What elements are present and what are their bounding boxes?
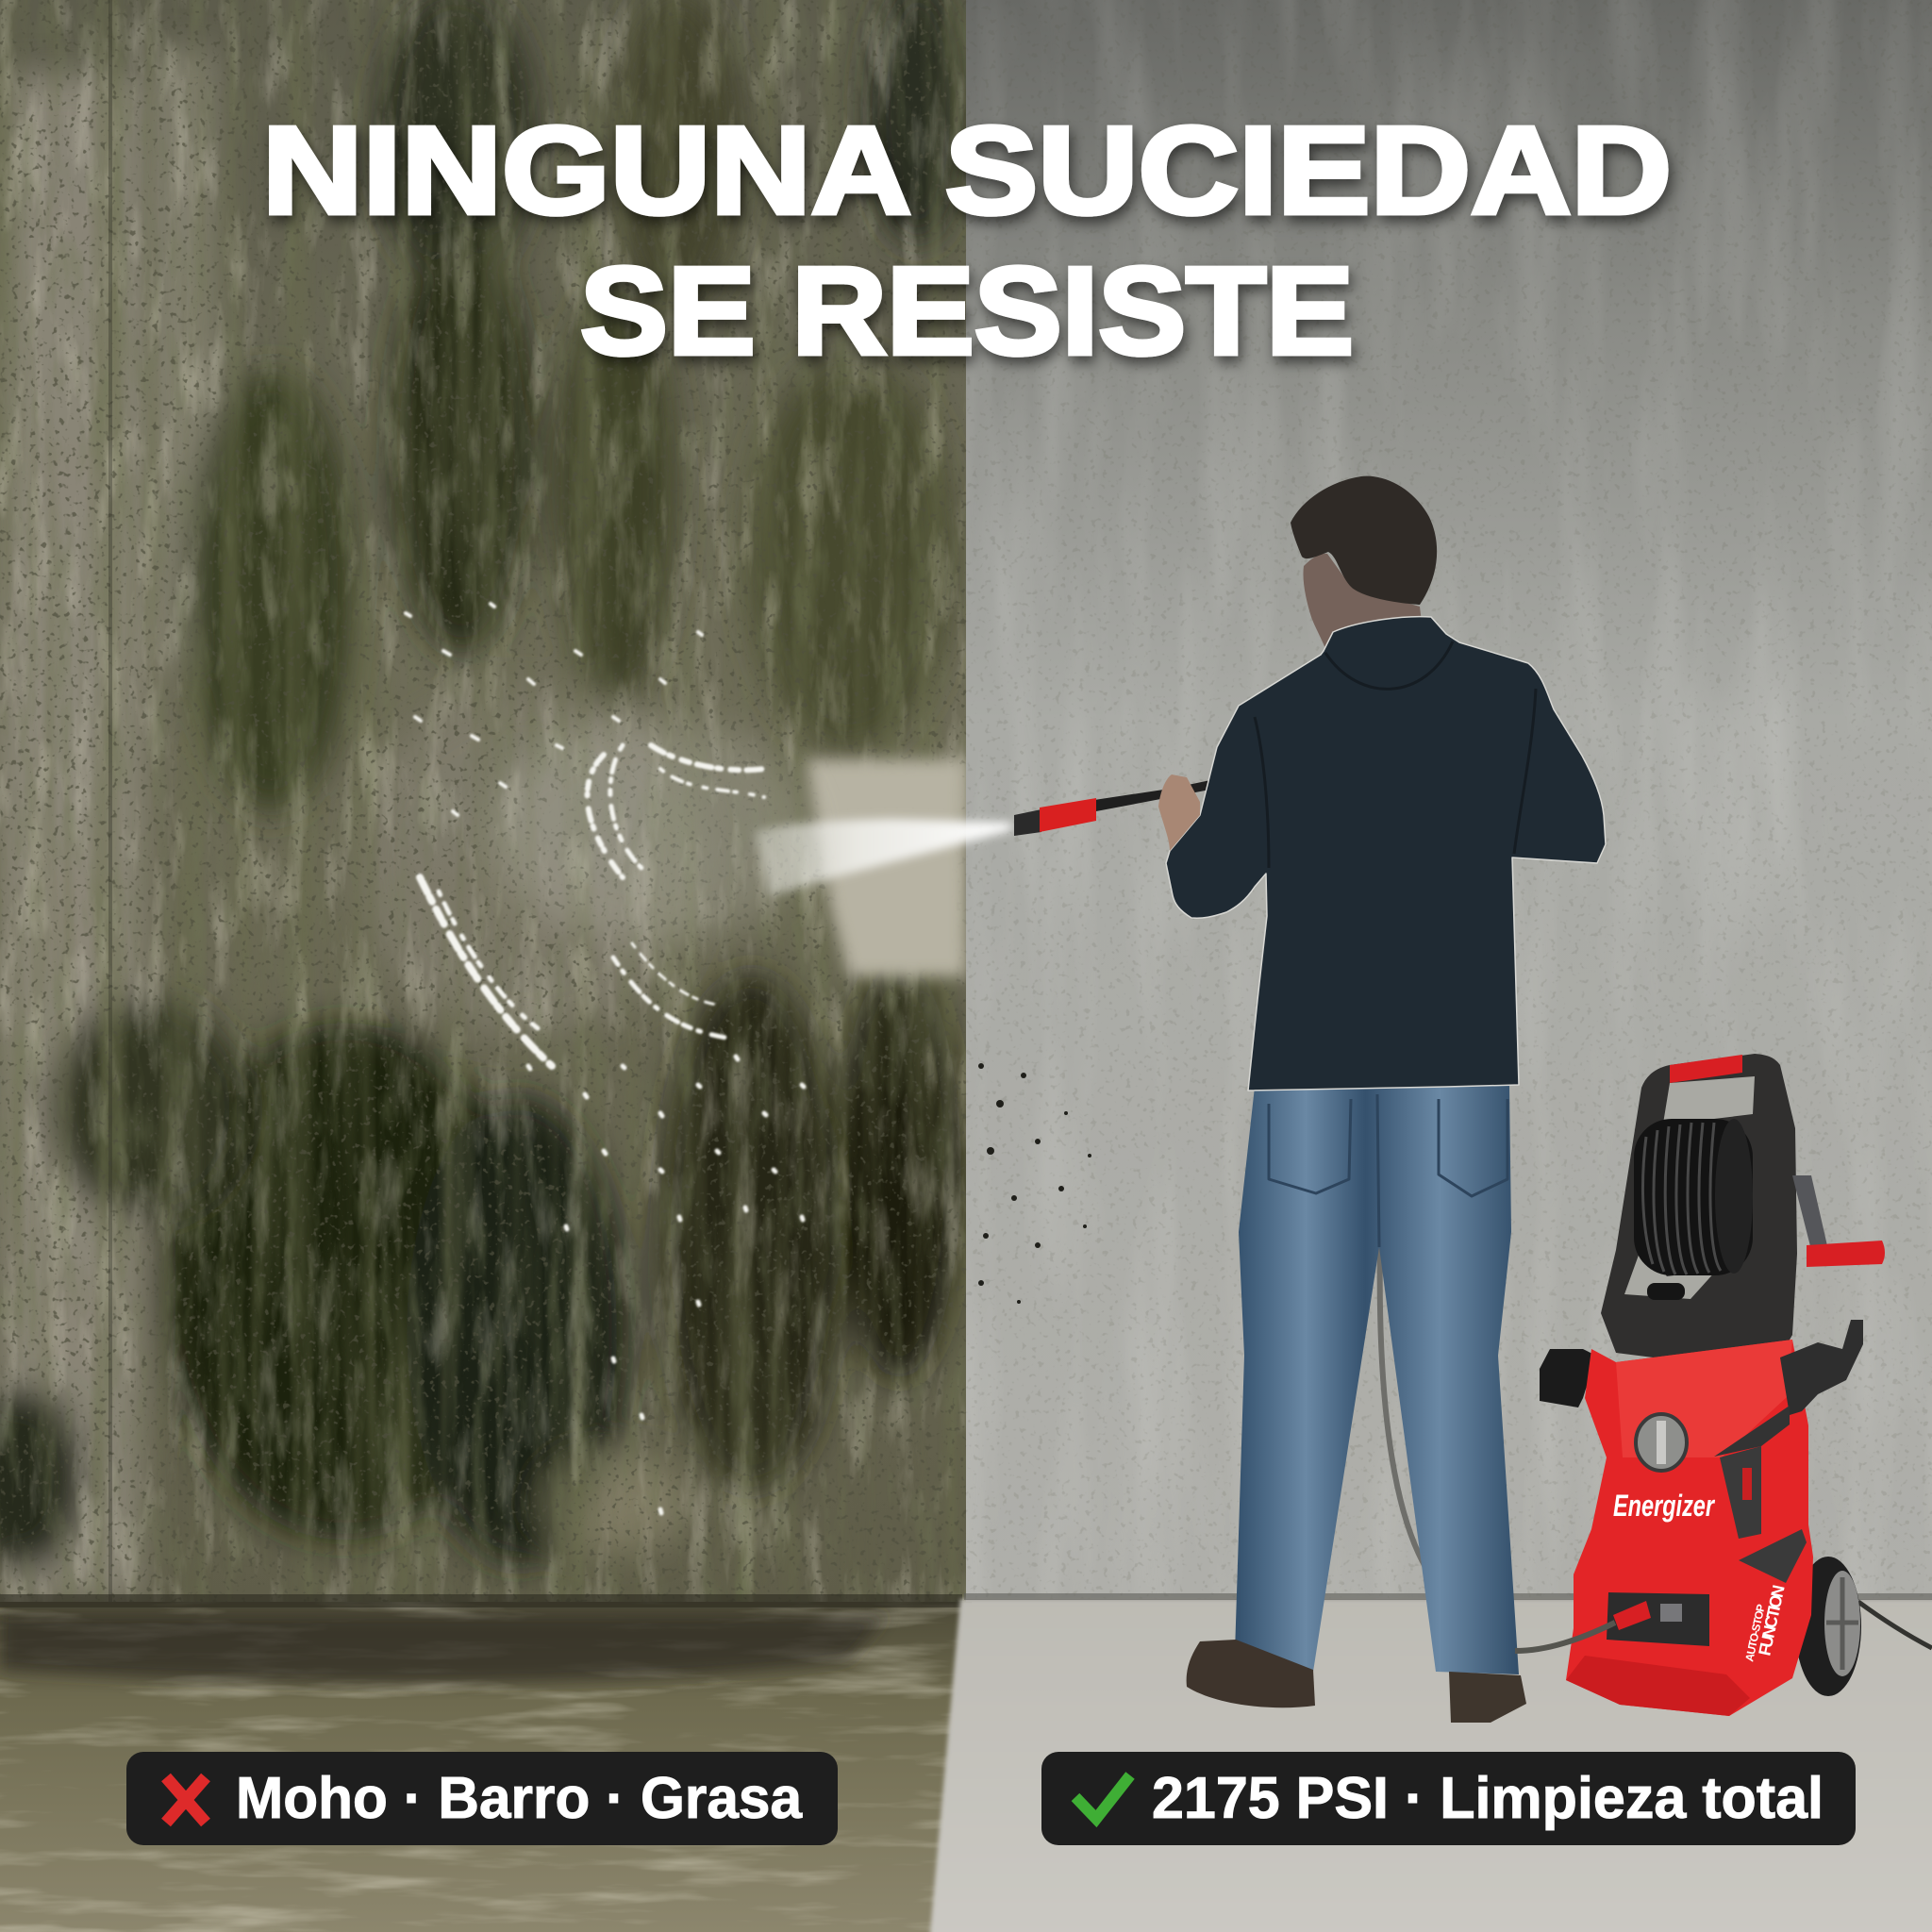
title line 1: NINGUNA SUCIEDAD (262, 101, 1672, 240)
wall texture (0, 0, 966, 1604)
function label: AUTO-STOP (1742, 1603, 1768, 1663)
hand (1158, 774, 1200, 851)
crank (1792, 1175, 1828, 1250)
frame openings (1624, 1076, 1755, 1299)
frame (1601, 1054, 1797, 1363)
badge text: solution: 2175 PSI · Limpieza total (1152, 1766, 1824, 1831)
badge text: problem: Moho · Barro · Grasa (236, 1766, 803, 1831)
man (1014, 476, 1606, 1723)
dark wedge (1714, 1406, 1790, 1457)
hose reel (1634, 1119, 1753, 1275)
base band (1566, 1656, 1750, 1716)
front hose (1515, 1601, 1651, 1651)
cleaned strip (807, 759, 966, 976)
vents (1720, 1446, 1761, 1539)
red body (1566, 1340, 1813, 1716)
wheel (1795, 1557, 1861, 1696)
crank handle (1807, 1241, 1885, 1267)
neck and face (1303, 554, 1422, 653)
panel: clean floor (929, 1593, 1932, 1932)
dark dirt splatter (978, 1063, 1091, 1304)
icon: green check (1075, 1775, 1130, 1819)
upper lighter panel (1616, 1340, 1792, 1457)
panel: clean wall (966, 0, 1932, 1599)
connector panel (1607, 1592, 1709, 1646)
function label (1742, 1583, 1789, 1663)
moss patches (0, 0, 970, 1602)
title line 2: SE RESISTE (580, 242, 1354, 380)
panel: dirty floor (0, 1594, 972, 1932)
right boot (1449, 1672, 1526, 1723)
hose (1380, 1245, 1434, 1580)
power cord (1858, 1602, 1932, 1648)
shirt (1166, 617, 1606, 1091)
pressure washer (1515, 1054, 1885, 1716)
side panel (1739, 1529, 1807, 1583)
icon: red cross (166, 1777, 206, 1823)
grip (1670, 1055, 1742, 1083)
right holder (1780, 1320, 1863, 1415)
left boot (1187, 1640, 1315, 1707)
title (262, 101, 1672, 380)
spray jet (755, 819, 1011, 896)
brand name: Energizer (1613, 1489, 1715, 1523)
jeans (1235, 1085, 1519, 1674)
badge: problem (126, 1752, 838, 1845)
concrete seam (108, 0, 112, 1604)
knob cap (1647, 1283, 1685, 1300)
panel: dirty wall (0, 0, 970, 1604)
left holder (1540, 1349, 1596, 1407)
badge: solution (1041, 1752, 1856, 1845)
lance (1014, 779, 1215, 836)
dial (1636, 1414, 1687, 1471)
hair (1291, 476, 1437, 605)
function label: FUNCTION (1755, 1583, 1789, 1657)
water splash (406, 604, 811, 1513)
